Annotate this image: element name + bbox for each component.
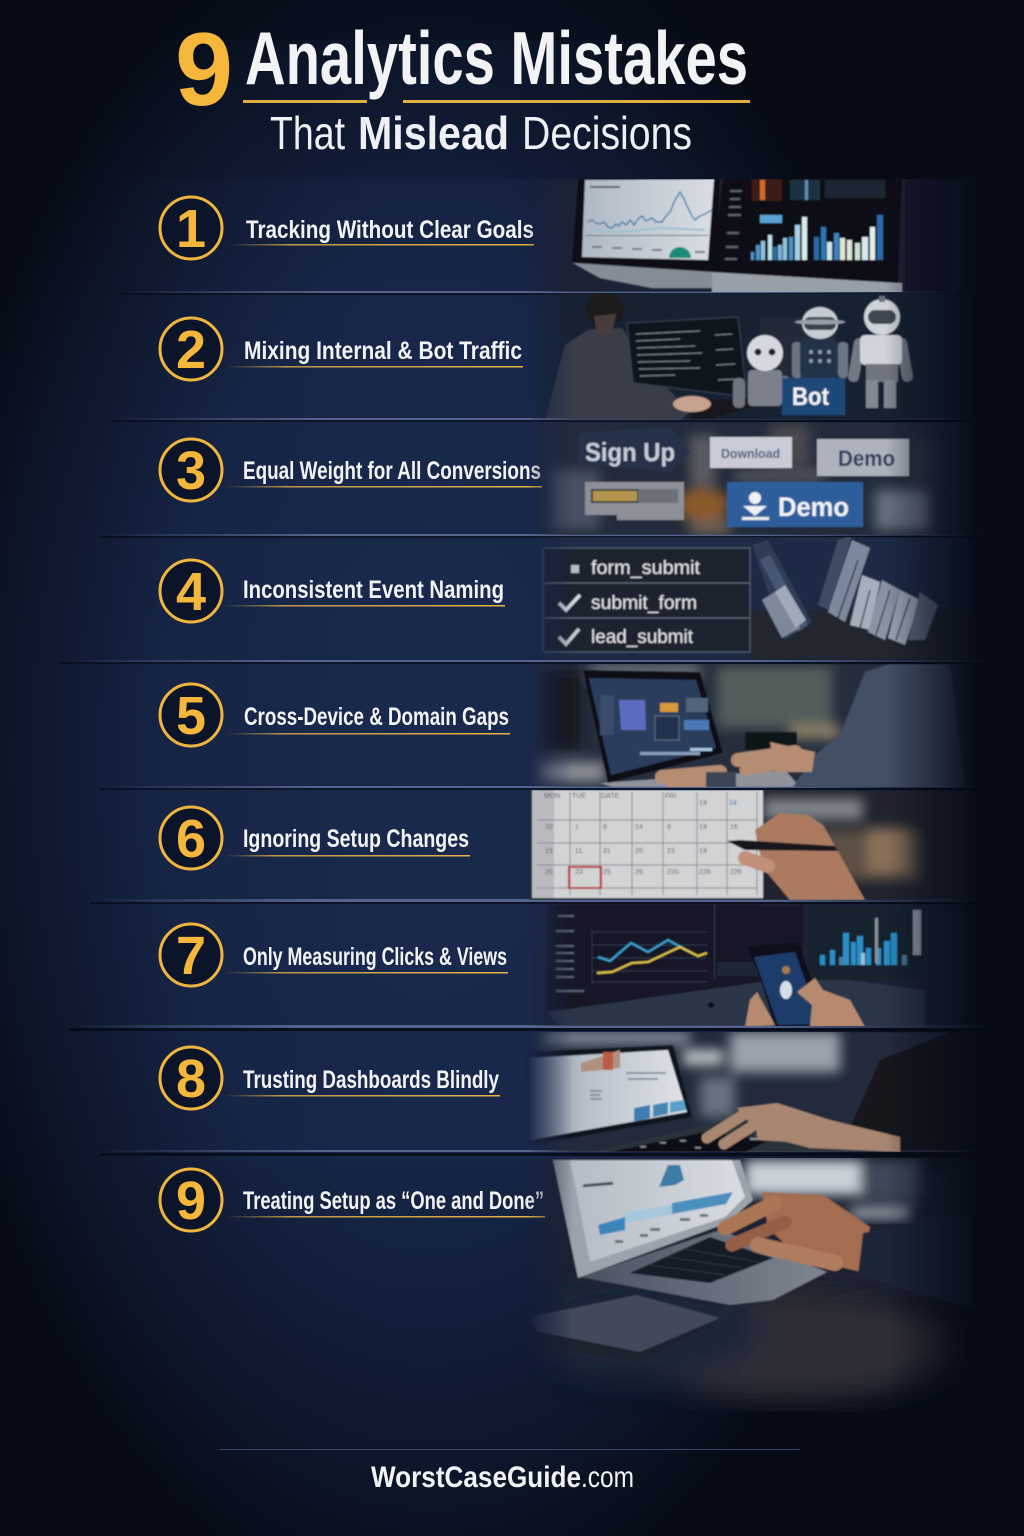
panel: 1 Tracking Without Clear Goals xyxy=(160,178,1024,293)
number badge 8 xyxy=(160,1047,222,1109)
Sign Up arrow: Sign Up xyxy=(585,437,675,467)
robot 1 xyxy=(733,335,790,408)
phone xyxy=(748,942,818,1027)
label 8: Trusting Dashboards Blindly xyxy=(243,1066,499,1094)
label 1: Tracking Without Clear Goals xyxy=(246,216,534,244)
label 2: Mixing Internal & Bot Traffic xyxy=(244,337,522,365)
image: monitors and phone xyxy=(530,904,1024,1027)
check xyxy=(559,595,580,610)
calendar: 31 xyxy=(603,848,611,855)
underline 6 xyxy=(225,855,470,856)
calendar: 23 xyxy=(667,848,675,855)
underline 8 xyxy=(225,1095,500,1096)
number badge 6: 6 xyxy=(176,809,206,869)
calendar: 26 xyxy=(635,869,643,876)
headline underline xyxy=(243,100,750,103)
number badge 5: 5 xyxy=(176,686,206,746)
hands xyxy=(745,978,865,1027)
calendar: DATE xyxy=(601,793,619,800)
number badge 3: 3 xyxy=(176,441,206,501)
event name table xyxy=(543,548,750,652)
person xyxy=(545,292,690,420)
Demo grey button: Demo xyxy=(838,446,895,471)
sleeve xyxy=(793,664,965,787)
subtitle: Mislead xyxy=(358,107,509,159)
Demo blue button xyxy=(727,482,863,527)
form field xyxy=(585,482,684,520)
headline: Analytics Mistakes xyxy=(245,16,748,100)
left monitor screen xyxy=(582,179,714,260)
panel: 9 Treating Setup as One and Done xyxy=(160,1158,1024,1400)
hand xyxy=(745,813,865,900)
calendar: MON xyxy=(544,793,560,800)
left sidebar xyxy=(556,915,584,992)
calendar: 226 xyxy=(730,869,742,876)
image: laptop on desk xyxy=(480,1158,1024,1400)
hand xyxy=(725,1192,870,1272)
calendar: 16 xyxy=(730,824,738,831)
right monitor bar chart xyxy=(751,215,883,260)
number badge 7 xyxy=(160,924,222,986)
label 5: Cross-Device & Domain Gaps xyxy=(244,703,509,731)
laptop base xyxy=(580,1230,827,1305)
subtitle: That xyxy=(270,107,345,159)
calendar: 19 xyxy=(699,848,707,855)
underline 3 xyxy=(225,486,542,488)
footer rule xyxy=(220,1449,800,1450)
right monitor xyxy=(810,907,923,980)
label 3: Equal Weight for All Conversions xyxy=(243,457,541,485)
calendar: 23 xyxy=(575,869,583,876)
calendar: TUE xyxy=(572,793,586,800)
underline 9 xyxy=(225,1216,545,1218)
label 7: Only Measuring Clicks & Views xyxy=(243,943,507,971)
image: person at code screen with bots xyxy=(530,293,953,420)
hands xyxy=(662,742,815,787)
underline 4 xyxy=(225,605,505,606)
laptop screen xyxy=(525,1045,692,1146)
robot 2 xyxy=(792,307,848,379)
number badge 6 xyxy=(160,807,222,869)
number badge 4 xyxy=(160,560,222,622)
hand and keyboard xyxy=(673,396,753,420)
calendar: 20 xyxy=(635,848,643,855)
hand xyxy=(707,1103,900,1152)
footer brand: WorstCaseGuide xyxy=(371,1461,581,1494)
underline 5 xyxy=(226,733,510,734)
calendar: 14 xyxy=(635,824,643,831)
Demo blue button: Demo xyxy=(778,492,849,522)
image: event name list and binders xyxy=(542,537,962,660)
image: conversion buttons xyxy=(530,422,958,535)
calendar: 10 xyxy=(545,824,553,831)
calendar: 8 xyxy=(603,824,607,831)
number badge 9: 9 xyxy=(176,1171,206,1231)
calendar: 220 xyxy=(667,869,679,876)
Bot sign xyxy=(782,378,845,415)
event: form_submit: form_submit xyxy=(591,558,701,579)
panel: 4 Inconsistent Event Naming xyxy=(160,535,1024,660)
title xyxy=(175,12,750,159)
calendar: 1 xyxy=(575,824,579,831)
Download button: Download xyxy=(721,446,780,461)
image: hand on laptop dashboard xyxy=(525,1032,1024,1152)
label 4: Inconsistent Event Naming xyxy=(243,576,504,604)
line chart xyxy=(592,930,707,984)
icon: form xyxy=(571,565,579,573)
calendar: 19 xyxy=(699,824,707,831)
footer brand: .com xyxy=(581,1461,634,1494)
notebook xyxy=(530,1295,720,1362)
event: submit_form: submit_form xyxy=(591,593,697,614)
keyboard xyxy=(590,1122,855,1152)
number badge 4: 4 xyxy=(176,562,206,622)
calendar: FRI xyxy=(665,793,676,800)
panel: 6 Ignoring Setup Changes xyxy=(160,790,1024,900)
sleeve xyxy=(858,1210,1010,1320)
Sign Up arrow xyxy=(578,427,690,472)
calendar: 226 xyxy=(699,869,711,876)
number badge 8: 8 xyxy=(176,1049,206,1109)
panel: 2 Mixing Internal & Bot Traffic xyxy=(160,292,1024,420)
underline 7 xyxy=(225,972,508,974)
number badge 1 xyxy=(160,197,222,259)
row separators xyxy=(60,291,990,1156)
number badge 3 xyxy=(160,439,222,501)
panel: 8 Trusting Dashboards Blindly xyxy=(160,1032,1024,1152)
calendar: 8 xyxy=(667,824,671,831)
laptop screen xyxy=(553,1160,753,1278)
calendar: 20 xyxy=(545,869,553,876)
pen xyxy=(727,840,838,851)
number badge 5 xyxy=(160,684,222,746)
underline 1 xyxy=(228,244,534,246)
number badge 2 xyxy=(160,318,222,380)
red date highlight xyxy=(569,867,601,888)
numeral 9: 9 xyxy=(175,12,233,128)
panel: 3 Equal Weight for All Conversions xyxy=(160,422,1024,535)
image: laptop and hands xyxy=(532,664,965,787)
event: lead_submit: lead_submit xyxy=(591,627,694,648)
number badge 1: 1 xyxy=(176,199,206,259)
underline 2 xyxy=(226,366,523,368)
image: calendar and hand with pen xyxy=(529,790,952,900)
calendar: 19 xyxy=(699,800,707,807)
check xyxy=(559,629,579,644)
number badge 2: 2 xyxy=(176,320,206,380)
number badge 7: 7 xyxy=(176,926,206,986)
laptop xyxy=(583,670,723,783)
label 6: Ignoring Setup Changes xyxy=(243,825,469,853)
Download button xyxy=(710,437,792,468)
calendar: 25 xyxy=(603,869,611,876)
calendar: 24 xyxy=(729,800,737,807)
panel: 7 Only Measuring Clicks & Views xyxy=(160,904,1024,1027)
binders xyxy=(752,535,938,645)
code monitor xyxy=(627,317,747,397)
subtitle: Decisions xyxy=(522,107,692,159)
number badge 9 xyxy=(160,1169,222,1231)
icon: download xyxy=(742,492,769,520)
Demo grey button xyxy=(817,439,909,476)
label 9: Treating Setup as “One and Done” xyxy=(243,1187,544,1215)
image: dashboards on monitors xyxy=(526,179,954,292)
calendar xyxy=(532,790,763,898)
calendar: 11 xyxy=(575,848,582,855)
robot 3 xyxy=(847,296,914,408)
calendar: 15 xyxy=(545,848,553,855)
Bot sign: Bot xyxy=(792,383,830,411)
panel: 5 Cross-Device & Domain Gaps xyxy=(160,664,1024,787)
